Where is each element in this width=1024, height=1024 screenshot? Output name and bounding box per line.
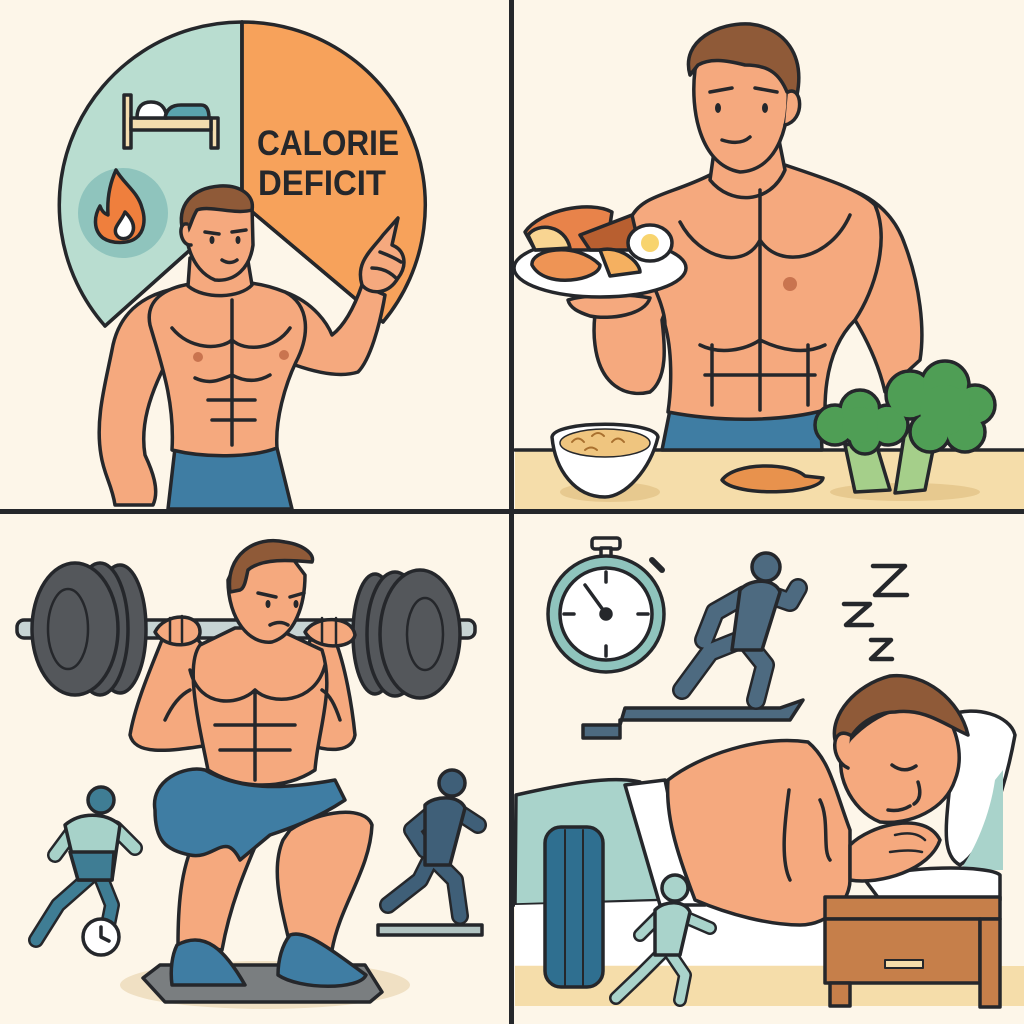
table — [515, 450, 1024, 509]
figure: pointing man — [99, 186, 404, 509]
panel: recovery — [515, 538, 1024, 1007]
label: calorie deficit: CALORIE — [257, 124, 399, 163]
platform — [120, 961, 410, 1009]
panel: calorie deficit — [59, 22, 425, 509]
stopwatch — [548, 538, 664, 672]
bowl — [552, 424, 658, 497]
foam roller — [545, 827, 603, 987]
label: calorie deficit: DEFICIT — [258, 164, 386, 203]
small food — [722, 466, 823, 492]
icon: flame — [78, 168, 168, 258]
plate of food — [514, 207, 686, 297]
label: calorie deficit — [257, 124, 399, 203]
treadmill runner — [583, 553, 803, 738]
runner with clock — [36, 787, 135, 955]
small runner — [616, 875, 710, 1000]
barbell — [17, 563, 475, 698]
panel: strength training — [17, 541, 482, 1009]
figure: man with plate — [568, 24, 922, 450]
nightstand — [825, 897, 1000, 1007]
icon: broccoli — [815, 361, 995, 493]
figure: squatting man — [130, 541, 372, 986]
pie chart — [59, 22, 425, 326]
floor — [515, 966, 1024, 1006]
panel: nutrition — [514, 24, 1024, 509]
sleeping man — [668, 676, 968, 925]
icon: bed — [124, 95, 218, 148]
sleep z — [844, 566, 907, 659]
runner right — [378, 770, 482, 935]
bed — [515, 711, 1015, 965]
